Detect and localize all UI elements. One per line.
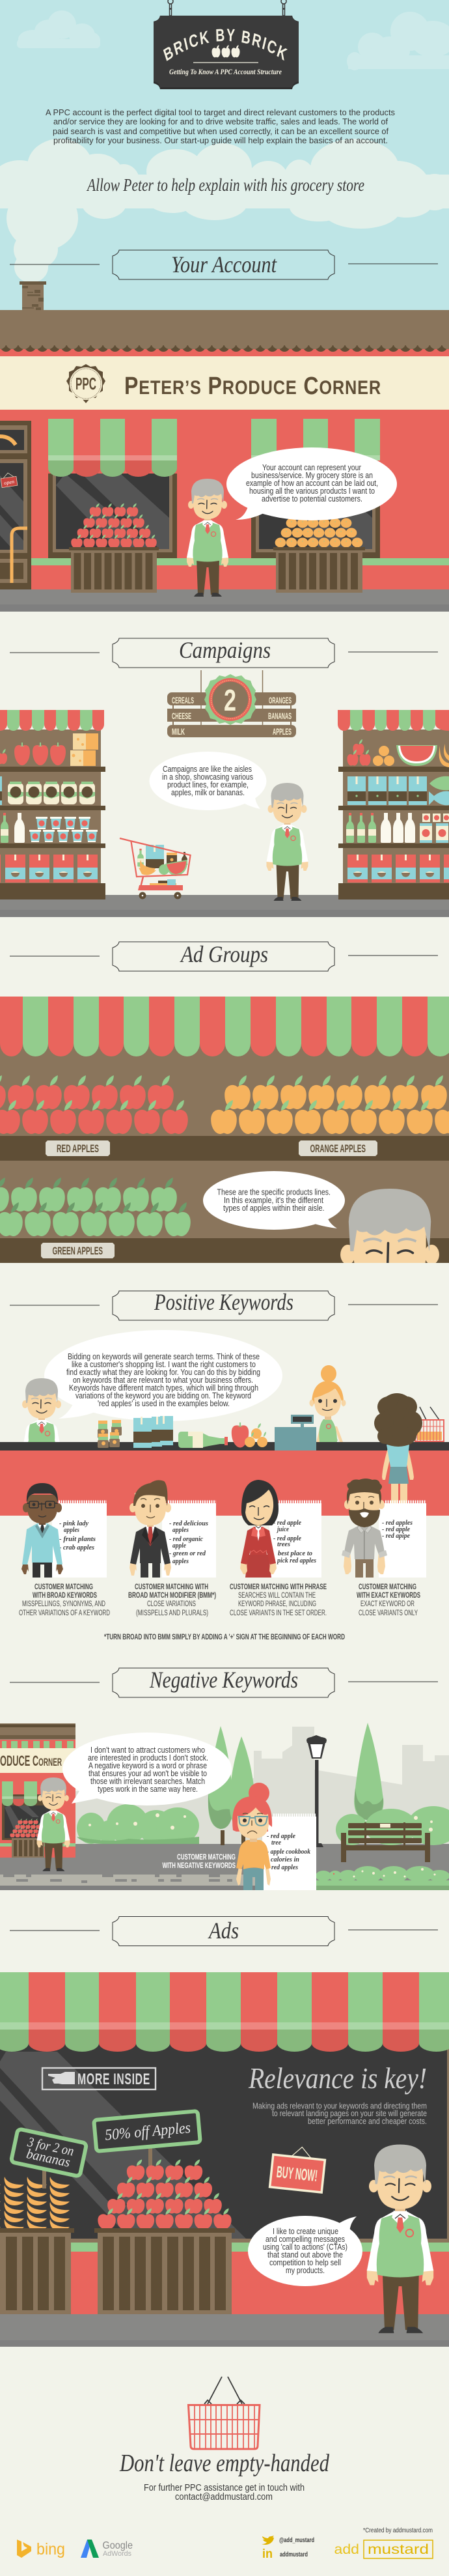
- more inside sign: MORE INSIDE: [77, 2071, 150, 2088]
- cereal boxes right: [347, 855, 449, 883]
- shopping list 2: apples: [172, 1557, 189, 1565]
- shopping list 3: - red apple: [273, 1535, 301, 1542]
- aisle shelf right: [338, 710, 449, 899]
- caption: BMM: (MISSPELLS AND PLURALS): [136, 1609, 208, 1617]
- jars: [0, 776, 95, 805]
- Peter at till: [22, 1378, 61, 1442]
- label: green apples: [41, 1243, 115, 1258]
- shopping list 4: - red apples: [382, 1519, 413, 1527]
- bushes right: [336, 1806, 449, 1845]
- big awning: [0, 997, 449, 1056]
- 50% off sign: [94, 2111, 200, 2169]
- sign band: [0, 356, 449, 410]
- speech bubble: negative keywords: that ensures your ad won't be visible to: [88, 1769, 207, 1778]
- customer: phrase keywords: [240, 1480, 279, 1578]
- speech bubble: your account: example of how an account can be laid out,: [246, 479, 378, 488]
- caption: BMM: CUSTOMER MATCHING WITH: [135, 1583, 208, 1591]
- Peter large: [367, 2144, 433, 2333]
- bushes centre: [77, 1804, 199, 1844]
- customer: broad keywords: [21, 1483, 63, 1578]
- shopping list: negative: - red apple: [267, 1832, 295, 1840]
- bottles and tins: [346, 813, 449, 843]
- intro text: [46, 107, 395, 145]
- crates ads: [0, 2228, 235, 2314]
- logo: add mustard: add: [334, 2542, 359, 2557]
- panel: street scene: [0, 1723, 449, 1890]
- speech bubble: positive keywords: 'red apples' is used in the examples below.: [98, 1399, 230, 1408]
- aisle shelf left: [0, 710, 105, 899]
- speech bubble: ads: [248, 2216, 362, 2286]
- fruit: [347, 739, 449, 767]
- footer logos: [17, 2526, 433, 2561]
- pavement ads: [0, 2314, 449, 2347]
- label: orange apples: ORANGE APPLES: [310, 1142, 366, 1155]
- caption: exact: CUSTOMER MATCHING: [359, 1583, 416, 1591]
- customer: exact keywords: [342, 1479, 387, 1578]
- speech bubble: negative keywords: A negative keyword is a word or phrase: [88, 1761, 207, 1770]
- hedge and grass: [316, 1866, 449, 1890]
- sign board: [154, 16, 299, 89]
- shopping list 4: - red apipe: [382, 1532, 410, 1540]
- tree 3: [354, 1723, 383, 1827]
- caption: BMM: BROAD MATCH MODIFIER (BMM*): [128, 1592, 216, 1600]
- caption: exact: CLOSE VARIANTS ONLY: [359, 1609, 418, 1617]
- green apples: [0, 1178, 191, 1236]
- logo: Google AdWords: [81, 2540, 133, 2558]
- shopping list: negative: red apples: [271, 1863, 298, 1871]
- footer call to action: [119, 2377, 330, 2502]
- speech bubble: campaigns: Campaigns are like the aisles: [163, 765, 252, 774]
- customer from behind: [374, 1393, 444, 1503]
- mini shop: ODUCE CORNER: [0, 1753, 62, 1769]
- caption: phrase: [230, 1583, 327, 1617]
- shelf boards: [0, 1136, 449, 1263]
- shelf boards left: [0, 767, 105, 899]
- caption: exact: EXACT KEYWORD OR: [361, 1600, 415, 1608]
- caption: negative: CUSTOMER MATCHING: [177, 1854, 236, 1861]
- caption: exact: [357, 1583, 420, 1617]
- Peter at mini shop: [37, 1777, 70, 1871]
- cashier: [310, 1365, 346, 1442]
- caption: BMM: CLOSE VARIATIONS: [147, 1600, 196, 1608]
- shopping list 2: - green or red: [169, 1550, 206, 1557]
- heading: Ads: Ads: [208, 1918, 239, 1944]
- shopping list 3: juice: [276, 1525, 289, 1533]
- aisle sign: ORANGES: [269, 695, 292, 705]
- shelf awning right: [338, 710, 449, 731]
- aisle number badge: [204, 674, 256, 725]
- hanging title sign: [154, 0, 299, 89]
- speech bubble: your account: business/service. My grocery store is an: [251, 471, 373, 480]
- heading: Positive Keywords: [10, 1289, 438, 1320]
- intro text: paid search is vast and competitive but when used correctly, it can be an excellent source of: [53, 126, 388, 136]
- aisle sign: [167, 670, 296, 737]
- bottles and yoghurts: [1, 813, 98, 843]
- aisle number badge: 2: [224, 683, 236, 717]
- shopping list 1: - fruit plants: [59, 1535, 96, 1543]
- social links: addmustard: [280, 2551, 308, 2558]
- shopping list: negative: - calories in: [267, 1856, 299, 1863]
- script intro line: Allow Peter to help explain with his grocery store: [86, 175, 364, 195]
- logo: add mustard: mustard: [368, 2542, 429, 2557]
- speech bubble: campaigns: in a shop, showcasing various: [162, 772, 253, 782]
- closing text: For further PPC assistance get in touch with: [144, 2482, 305, 2493]
- shopping trolley: [120, 838, 191, 899]
- awning right: [251, 419, 380, 460]
- aisle sign: CEREALS: [172, 695, 194, 705]
- caption: negative: [163, 1854, 236, 1870]
- speech bubble: your account: housing all the various products I want to: [249, 487, 375, 496]
- roof: [0, 310, 449, 346]
- speech bubble: ads: I like to create unique: [273, 2227, 338, 2236]
- shopping list 3: - red apple: [273, 1519, 301, 1527]
- shopping list 1: - pink lady: [59, 1520, 88, 1527]
- intro text: and/or service they are looking for and to drive website traffic, sales and leads. The world of: [53, 117, 388, 126]
- heading: Campaigns: Campaigns: [179, 637, 271, 663]
- speech bubble: campaigns: apples, milk or bananas.: [171, 788, 245, 797]
- caption: phrase: SEARCHES WILL CONTAIN THE: [238, 1592, 316, 1600]
- speech bubble: positive keywords: [44, 1330, 282, 1421]
- caption: phrase: KEYWORD PHRASE, INCLUDING: [238, 1600, 316, 1608]
- label: orange apples: [299, 1140, 377, 1156]
- speech bubble: campaigns: [150, 752, 267, 810]
- caption: phrase: CLOSE VARIANTS IN THE SET ORDER.: [230, 1609, 327, 1617]
- heading: Positive Keywords: Positive Keywords: [154, 1289, 293, 1315]
- caption: broad: CUSTOMER MATCHING: [34, 1583, 93, 1591]
- speech bubble: ads: that stand out above the: [267, 2250, 343, 2259]
- red apples: [0, 1075, 188, 1134]
- trolley contents: [137, 845, 187, 876]
- speech bubble: positive keywords: variations of the keyword you are bidding on. The keyword: [75, 1391, 251, 1400]
- bottle on counter: [178, 1432, 228, 1448]
- panel: ads store front: [0, 1972, 449, 2347]
- PPC badge: [66, 364, 105, 403]
- small cloud right: [347, 12, 449, 70]
- cereal boxes: [0, 855, 98, 883]
- relevance text: better performance and cheaper costs.: [308, 2117, 427, 2126]
- skyline: [75, 1727, 449, 1844]
- speech bubble: your account: Your account can represent your: [262, 463, 361, 472]
- aisle sign: APPLES: [273, 726, 292, 737]
- logo: bing: bing: [36, 2540, 65, 2558]
- woman with glasses: [232, 1783, 272, 1890]
- aisle sign: BANANAS: [268, 711, 292, 721]
- caption: broad: WITH BROAD KEYWORDS: [33, 1592, 97, 1600]
- speech bubble: positive keywords: like a customer's shopping list. I want the right customers to: [72, 1360, 256, 1369]
- shopping list: negative: [262, 1815, 316, 1890]
- heading: Ads: [10, 1916, 438, 1946]
- apple pile: [71, 503, 157, 548]
- speech bubble: ad groups: [203, 1171, 345, 1230]
- speech bubble: negative keywords: I don't want to attract customers who: [90, 1746, 205, 1755]
- speech bubble: ads: my products.: [286, 2266, 325, 2275]
- social links: [262, 2536, 314, 2561]
- match type captions: [19, 1583, 420, 1641]
- shopping list 2: apples: [172, 1526, 189, 1534]
- PPC badge: PPC: [75, 374, 96, 393]
- three apples: [212, 45, 239, 57]
- label: red apples: [46, 1140, 110, 1156]
- sky panel: [0, 0, 449, 311]
- green sill: [31, 558, 449, 565]
- speech bubble: ads: competition to help sell: [269, 2258, 341, 2267]
- heading: Your Account: [10, 250, 438, 279]
- shopping list 2: - red organic: [169, 1535, 203, 1543]
- open sign: [0, 472, 18, 488]
- window glass: [0, 2037, 447, 2239]
- shopping list 3: [269, 1502, 321, 1578]
- big awning ads: [0, 1972, 449, 2052]
- buy now sign: BUY NOW!: [276, 2163, 318, 2185]
- shopping list 4: - red apple: [382, 1525, 410, 1533]
- speech bubble: your account: [226, 447, 397, 520]
- speech bubble: negative keywords: those with irrelevant searches. Match: [90, 1777, 205, 1786]
- open sign: open: [4, 479, 15, 486]
- panel: apple shelves: [0, 997, 449, 1263]
- speech bubble: your account: advertise to potential customers.: [262, 494, 362, 503]
- big smoke cloud: [0, 139, 449, 283]
- till: [275, 1415, 316, 1451]
- speech bubble: ads: and compelling messages: [265, 2235, 345, 2244]
- pavement: [0, 589, 449, 612]
- heading: Negative Keywords: [10, 1667, 438, 1697]
- caption: negative: WITH NEGATIVE KEYWORDS: [163, 1862, 236, 1870]
- crate left: [69, 547, 159, 593]
- logo: Google AdWords: Google: [103, 2540, 133, 2551]
- counter top: [0, 1442, 449, 1451]
- label: red apples: RED APPLES: [57, 1142, 99, 1155]
- apple pile ads: [98, 2159, 232, 2229]
- shopping list 1: - crab apples: [59, 1544, 94, 1551]
- speech bubble: ad groups: In this example, it's the different: [224, 1196, 323, 1205]
- shelf boards right: [338, 767, 449, 899]
- caption: BMM: [128, 1583, 216, 1617]
- crate right: [273, 547, 365, 593]
- caption: exact: WITH EXACT KEYWORDS: [357, 1592, 420, 1600]
- panel: shop front: [0, 310, 449, 612]
- shopping list 3: best place to: [278, 1550, 312, 1557]
- shopping list: negative: tree: [271, 1839, 281, 1847]
- speech bubble: negative keywords: [62, 1733, 232, 1805]
- Peter in aisle: [267, 783, 308, 901]
- intro text: profitability for your business. Our start-up guide will help explain the basics of an account.: [53, 135, 388, 145]
- heading: Ad Groups: Ad Groups: [180, 941, 268, 967]
- chimney: [20, 281, 46, 311]
- speech bubble: positive keywords: find exactly what they are looking for. You can do this by bidding: [66, 1368, 260, 1377]
- 3 for 2 sign: 3 for 2 on: [25, 2134, 75, 2159]
- street lamp: [306, 1735, 327, 1847]
- blue boxes and fish: [347, 776, 449, 805]
- buy now sign: [270, 2144, 326, 2192]
- aisle sign: MILK: [172, 726, 185, 737]
- speech bubble: negative keywords: are interested in products I don't stock.: [88, 1753, 208, 1762]
- logo: Google AdWords: AdWords: [103, 2550, 131, 2558]
- orange apples: [211, 1075, 449, 1134]
- large Peter face: [340, 1189, 439, 1263]
- heading: Negative Keywords: Negative Keywords: [149, 1667, 298, 1693]
- 3 for 2 sign: [11, 2129, 87, 2188]
- heading: Your Account: Your Account: [171, 251, 277, 277]
- panel: supermarket aisle: [0, 670, 449, 917]
- label: green apples: GREEN APPLES: [52, 1245, 103, 1257]
- wall band: [0, 2252, 449, 2314]
- closing text: contact@addmustard.com: [175, 2491, 273, 2502]
- door: [0, 421, 31, 589]
- shop window left: [48, 419, 177, 593]
- 3 for 2 sign: bananas: [25, 2145, 72, 2170]
- logo: add mustard: [334, 2540, 433, 2558]
- shopping list 2: - red delicious: [169, 1520, 208, 1527]
- 50% off sign: 50% off Apples: [104, 2119, 191, 2144]
- bananas: [0, 2177, 70, 2231]
- shopping list 1: apples: [64, 1526, 79, 1534]
- pepper and oranges: [232, 1422, 267, 1447]
- speech bubble: positive keywords: on keywords that are relevant to what your business offers.: [73, 1376, 253, 1385]
- more inside sign: [42, 2068, 156, 2089]
- speech bubble: campaigns: product lines, for example,: [167, 780, 249, 789]
- Peter shopkeeper: [187, 479, 228, 597]
- social links: @add_mustard: [279, 2536, 314, 2544]
- tree 1: [208, 1726, 233, 1845]
- shelf awning left: [0, 710, 104, 731]
- footnote: *TURN BROAD INTO BMM SIMPLY BY ADDING A '+' SIGN AT THE BEGINNING OF EACH WORD: [104, 1634, 345, 1641]
- customer: BMM keywords: [129, 1480, 171, 1578]
- caption: phrase: CUSTOMER MATCHING WITH PHRASE: [230, 1583, 327, 1591]
- intro text: A PPC account is the perfect digital tool to target and direct relevant customers to the products: [46, 107, 395, 117]
- jars on counter: [98, 1420, 122, 1448]
- peppers and cheese: [0, 733, 98, 766]
- logo: bing: [17, 2540, 65, 2558]
- shopping list 1: [52, 1502, 107, 1578]
- ground: [0, 1844, 449, 1890]
- closing text: [144, 2482, 305, 2502]
- caption: broad: [19, 1583, 110, 1617]
- small cloud left: [17, 10, 100, 48]
- speech bubble: ads: using 'call to actions' (CTAs): [263, 2243, 347, 2252]
- shopping list 2: [162, 1502, 216, 1578]
- shop wall: [0, 410, 449, 589]
- shopping list 3: trees: [277, 1540, 290, 1548]
- relevance text: [252, 2101, 427, 2126]
- icon: shopping basket: [189, 2377, 260, 2449]
- shopping list 4: [379, 1502, 426, 1578]
- boxes on counter: [133, 1416, 173, 1448]
- closing title: Don't leave empty-handed: [119, 2450, 330, 2477]
- panel: checkout counter: [0, 1330, 449, 1516]
- aisle sign: CHEESE: [172, 711, 191, 721]
- speech bubble: negative keywords: types work in the same way here.: [98, 1785, 198, 1794]
- panel: four customers: [21, 1479, 426, 1578]
- social links: in: [262, 2547, 273, 2561]
- caption: broad: MISSPELLINGS, SYNONYMS, AND: [22, 1600, 105, 1608]
- floor: [0, 895, 449, 917]
- caption: broad: OTHER VARIATIONS OF A KEYWORD: [19, 1609, 110, 1617]
- sign subtitle: Getting To Know A PPC Account Structure: [169, 67, 282, 76]
- speech bubble: ad groups: types of apples within their aisle.: [223, 1204, 324, 1213]
- shopping list 2: apple: [172, 1542, 186, 1550]
- tree 2: [229, 1736, 255, 1845]
- bench: [341, 1822, 430, 1862]
- sign title: BRICK BY BRICK: [163, 29, 288, 61]
- shopping list: negative: - apple cookbook: [267, 1848, 310, 1856]
- heading: Campaigns: [10, 637, 438, 668]
- shopping list 3: pick red apples: [277, 1557, 316, 1564]
- counter red: [0, 1451, 449, 1516]
- chains: [168, 0, 286, 16]
- shop window right: [251, 419, 380, 593]
- speech bubble: positive keywords: Bidding on keywords will generate search terms. Think of these: [68, 1352, 260, 1361]
- speech bubble: ad groups: These are the specific products lines.: [217, 1188, 331, 1197]
- heading: Ad Groups: [10, 941, 438, 971]
- shop name: PETER’S PRODUCE CORNER: [124, 373, 381, 400]
- speech bubble: positive keywords: Keywords have different match types, which will bring through: [69, 1383, 258, 1393]
- orange pile: [275, 518, 362, 547]
- awning left: [48, 419, 177, 477]
- mini shop: [0, 1723, 75, 1858]
